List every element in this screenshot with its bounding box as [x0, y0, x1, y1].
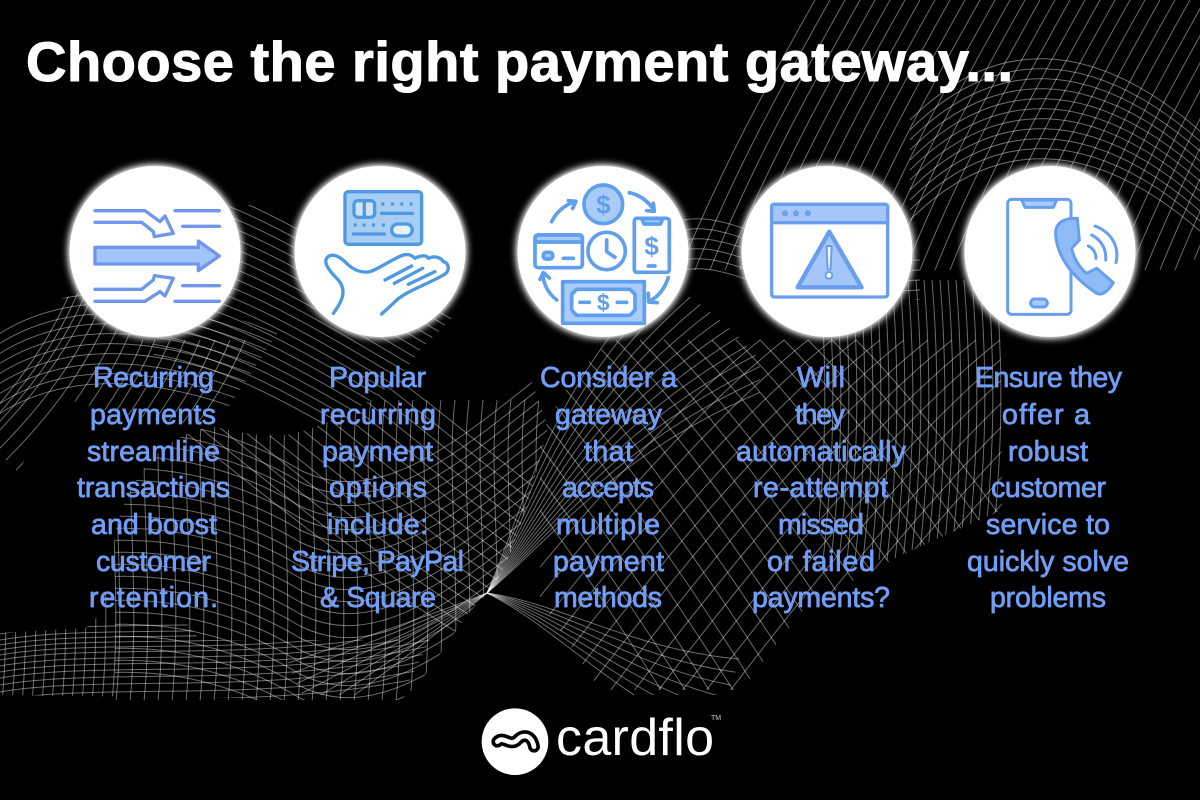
white circle 4 — [742, 166, 912, 337]
text: multiple payment methods: multiple — [556, 509, 660, 541]
text: popular options: recurring — [320, 399, 436, 431]
text: popular options: include: — [327, 509, 428, 541]
text: popular options: options — [329, 472, 427, 504]
trademark: TM — [711, 715, 721, 722]
text: customer service — [967, 362, 1129, 614]
text: recurring payments: payments — [90, 399, 216, 431]
icon: hand holding card — [326, 192, 448, 314]
icon: payment methods cycle: $ — [596, 189, 611, 219]
text: failed payments: missed — [778, 509, 864, 541]
text: multiple payment methods: methods — [554, 582, 662, 614]
text: recurring payments: streamline — [87, 436, 220, 468]
logo: cardflo — [482, 708, 721, 775]
text: customer service: customer — [991, 472, 1106, 504]
icon: phone call — [1008, 199, 1117, 314]
panel: failed payments — [736, 166, 912, 614]
text: failed payments: they — [795, 399, 846, 431]
text: customer service: service to — [986, 509, 1110, 541]
text: popular options: Stripe, PayPal — [291, 546, 464, 578]
logo mark — [482, 708, 548, 775]
text: customer service: quickly solve — [967, 546, 1129, 578]
text: customer service: Ensure they — [975, 362, 1123, 394]
text: multiple payment methods: that — [584, 436, 633, 468]
text: customer service: problems — [990, 582, 1106, 614]
text: failed payments: or failed — [767, 546, 875, 578]
panel: popular options — [291, 166, 466, 614]
text: failed payments — [736, 362, 907, 614]
text: multiple payment methods: payment — [553, 546, 664, 578]
panel: recurring payments — [70, 166, 240, 614]
white circle 1 — [70, 166, 240, 337]
text: popular options: & Square — [320, 582, 436, 614]
text: recurring payments: customer — [96, 546, 212, 578]
text: failed payments: Will — [797, 362, 845, 394]
icon: payment methods cycle — [535, 185, 669, 323]
text: multiple payment methods — [540, 362, 677, 614]
white circle 2 — [294, 166, 466, 337]
text: recurring payments: transactions — [77, 472, 230, 504]
text: multiple payment methods: Consider a — [540, 362, 677, 394]
logo wordmark: cardflo — [556, 709, 714, 767]
panel: customer service — [964, 166, 1136, 614]
title: Choose the right payment gateway... — [26, 30, 1013, 93]
text: recurring payments: Recurring — [93, 362, 214, 394]
icon: merging arrows — [95, 211, 219, 301]
text: recurring payments: retention. — [89, 582, 218, 614]
text: failed payments: payments? — [752, 582, 890, 614]
text: popular options: payment — [322, 436, 433, 468]
text: recurring payments — [77, 362, 230, 614]
icon: browser warning — [772, 204, 888, 297]
text: popular options: Popular — [329, 362, 426, 394]
icon: payment methods cycle: $ — [597, 290, 610, 316]
text: popular options — [291, 362, 464, 614]
text: failed payments: automatically — [736, 436, 907, 468]
text: customer service: robust — [1008, 436, 1088, 468]
text: customer service: offer a — [1002, 399, 1090, 431]
text: failed payments: re-attempt — [753, 472, 888, 504]
panel: multiple payment methods — [518, 166, 688, 614]
icon: payment methods cycle: $ — [644, 231, 659, 261]
white circle 3 — [518, 166, 688, 337]
white circle 5 — [964, 166, 1136, 337]
text: multiple payment methods: accepts — [562, 472, 654, 504]
text: recurring payments: and boost — [91, 509, 217, 541]
text: multiple payment methods: gateway — [555, 399, 663, 431]
